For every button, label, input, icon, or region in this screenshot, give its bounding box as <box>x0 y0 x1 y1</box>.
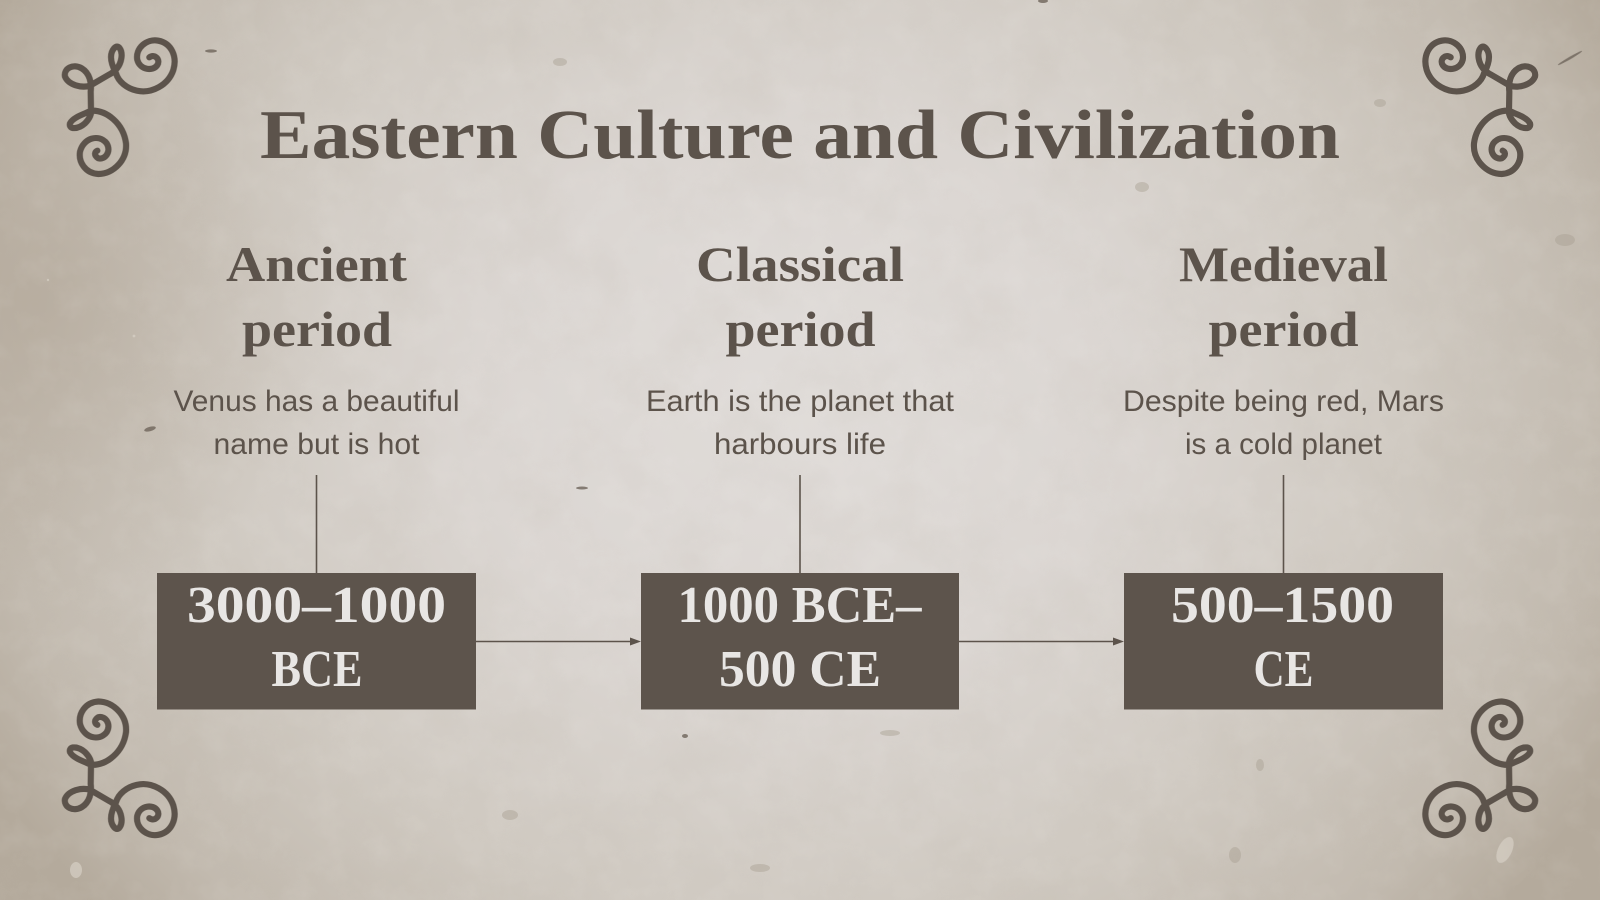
text block: Medieval description <box>1123 385 1444 461</box>
text block: Ancient description: name but is hot <box>214 428 420 461</box>
heading: Classical period: period <box>726 301 876 357</box>
connector: Medieval <box>1282 475 1284 574</box>
title: Eastern Culture and Civilization <box>260 97 1340 174</box>
column: Classical period <box>641 236 959 710</box>
date box: 500–1500 CE: CE <box>1254 641 1314 698</box>
heading: Medieval period: Medieval <box>1179 236 1388 292</box>
heading: Classical period <box>696 236 904 357</box>
text block: Ancient description <box>174 385 460 461</box>
date box: 500–1500 CE <box>1124 573 1443 710</box>
corner ornament: bottom left <box>65 702 175 835</box>
date box: 3000–1000 BCE <box>157 573 476 710</box>
text block: Classical description: Earth is the planet that <box>646 385 955 418</box>
date box: 1000 BCE–500 CE: 1000 BCE– <box>678 577 922 634</box>
arrow: Ancient to Classical <box>476 638 641 646</box>
corner ornament: bottom right <box>1425 702 1535 835</box>
heading: Classical period: Classical <box>696 236 904 292</box>
connector: Ancient <box>316 475 318 574</box>
text block: Classical description: harbours life <box>714 428 886 461</box>
text block: Medieval description: Despite being red, Mars <box>1123 385 1444 418</box>
date box: 1000 BCE–500 CE: 500 CE <box>719 641 881 698</box>
arrow: Classical to Medieval <box>959 638 1124 646</box>
date box: 1000 BCE–500 CE <box>641 573 959 710</box>
heading: Medieval period <box>1179 236 1388 357</box>
text block: Ancient description: Venus has a beautiful <box>174 385 460 418</box>
corner ornament: top left <box>65 40 175 174</box>
column: Medieval period <box>1123 236 1444 710</box>
heading: Ancient period: Ancient <box>226 236 407 292</box>
text block: Medieval description: is a cold planet <box>1185 428 1383 461</box>
heading: Ancient period <box>226 236 407 357</box>
date box: 3000–1000 BCE: 3000–1000 <box>187 577 446 634</box>
heading: Medieval period: period <box>1208 301 1359 357</box>
heading: Ancient period: period <box>242 301 392 357</box>
text block: Classical description <box>646 385 955 461</box>
date box: 3000–1000 BCE: BCE <box>272 641 362 698</box>
corner ornament: top right <box>1425 40 1535 174</box>
connector: Classical <box>799 475 801 574</box>
date box: 500–1500 CE: 500–1500 <box>1171 577 1394 634</box>
column: Ancient period <box>157 236 476 710</box>
